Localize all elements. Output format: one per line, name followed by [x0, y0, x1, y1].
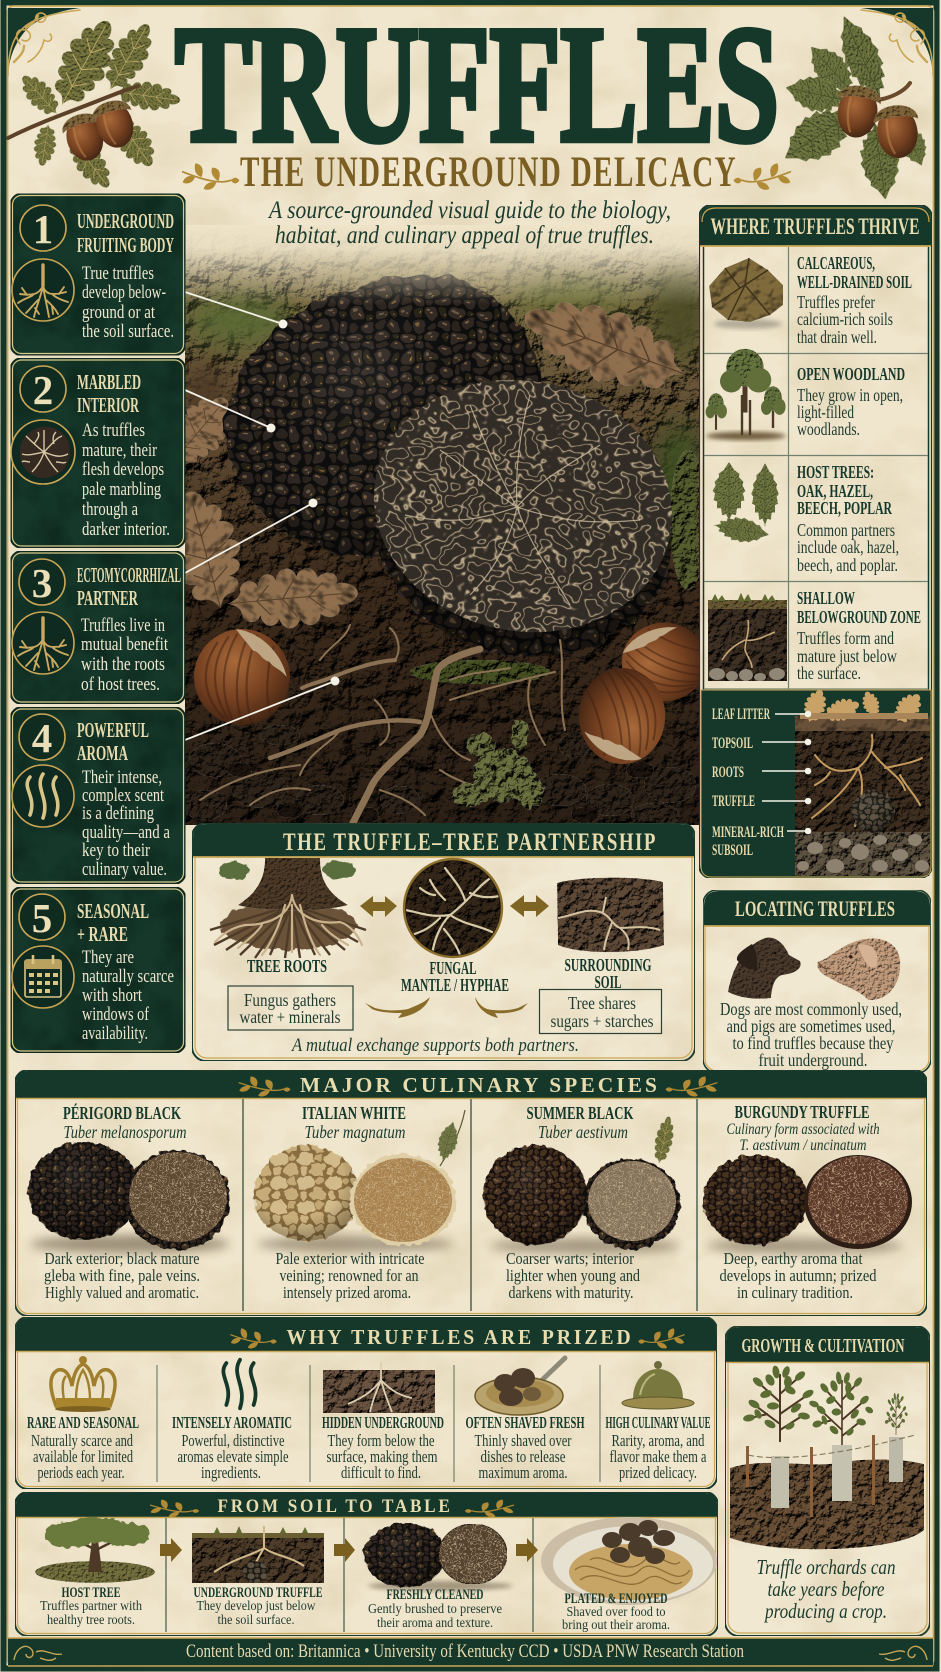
- reason: high culinary value: [606, 1361, 710, 1482]
- young trees in tubes: [743, 1365, 915, 1508]
- footer band: [8, 1638, 933, 1668]
- body text: with short: [82, 985, 143, 1006]
- reason: hidden underground: [322, 1362, 444, 1482]
- step: plated and enjoyed: Shaved over food to: [566, 1605, 666, 1620]
- species: burgundy truffle: Culinary form associated with: [726, 1121, 880, 1138]
- fungal mantle circle: [404, 859, 502, 958]
- labels: [247, 955, 652, 995]
- description: Dogs are most commonly used,: [720, 999, 902, 1019]
- body text: develop below-: [82, 282, 166, 303]
- body text: availability.: [82, 1023, 148, 1044]
- row: calcareous soil: Truffles prefer: [797, 292, 875, 312]
- step: host tree: HOST TREE: [62, 1585, 120, 1601]
- body text: ground or at: [82, 302, 156, 323]
- caption: Truffle orchards can: [756, 1555, 896, 1579]
- row: open woodland: [706, 349, 905, 440]
- layer labels: TRUFFLE: [712, 793, 755, 810]
- panel 5: seasonal and rare: [10, 887, 186, 1053]
- icon: aroma: [223, 1360, 256, 1408]
- illustration: [192, 1526, 324, 1583]
- species: burgundy truffle: Deep, earthy aroma that: [724, 1249, 863, 1268]
- header band: [704, 891, 930, 926]
- body text: [82, 420, 170, 540]
- heading: [77, 370, 141, 417]
- reason: often shaved fresh: Thinly shaved over: [474, 1431, 572, 1450]
- body text: True truffles: [82, 263, 154, 284]
- reason: hidden underground: difficult to find.: [341, 1463, 421, 1482]
- reason: high culinary value: flavor make them a: [610, 1447, 707, 1466]
- cut truffle: [804, 1155, 912, 1249]
- whole truffle: [28, 1142, 140, 1240]
- heading: PARTNER: [77, 586, 139, 610]
- species: italian white: veining; renowned for an: [280, 1266, 419, 1285]
- species: italian white: [254, 1103, 465, 1302]
- step: host tree: healthy tree roots.: [47, 1613, 135, 1628]
- reason: hidden underground: surface, making them: [326, 1447, 438, 1466]
- species: perigord black: [28, 1102, 230, 1302]
- heading: FRUITING BODY: [77, 233, 174, 257]
- tagline: [267, 197, 671, 249]
- row: host trees: OAK, HAZEL,: [797, 481, 873, 501]
- header band: WHY TRUFFLES ARE PRIZED: [286, 1325, 634, 1349]
- reason: intensely aromatic: aromas elevate simple: [178, 1447, 288, 1466]
- header band: [16, 1071, 926, 1098]
- icon: roots: [12, 259, 74, 321]
- heading: [77, 563, 181, 610]
- top fade into parchment: [185, 225, 699, 305]
- row: open woodland: They grow in open,: [797, 385, 903, 405]
- heading: SEASONAL: [77, 899, 149, 923]
- row: calcareous soil: CALCAREOUS,: [797, 253, 875, 273]
- description: fruit underground.: [758, 1050, 868, 1070]
- species: burgundy truffle: develops in autumn; prized: [720, 1266, 877, 1285]
- step: freshly cleaned: [364, 1523, 512, 1631]
- reason: intensely aromatic: [172, 1360, 292, 1482]
- icon: cloche: [622, 1361, 694, 1409]
- row: host trees: include oak, hazel,: [797, 537, 899, 557]
- icon: calendar: [12, 946, 74, 1008]
- species: italian white: ITALIAN WHITE: [302, 1103, 406, 1123]
- whole truffle: [703, 1155, 807, 1245]
- body text: is a defining: [82, 803, 154, 824]
- number badge: [20, 205, 66, 252]
- icon: limestone rock: [709, 258, 783, 329]
- leaf litter: [799, 686, 928, 728]
- description: [720, 999, 902, 1070]
- reason: intensely aromatic: ingredients.: [201, 1463, 261, 1482]
- caption: producing a crop.: [763, 1599, 887, 1623]
- body text: with the roots: [81, 654, 165, 675]
- header band: [16, 1493, 717, 1518]
- body text: naturally scarce: [82, 966, 174, 987]
- step: host tree: [35, 1517, 155, 1628]
- panel: why truffles are prized: [15, 1317, 717, 1489]
- layer labels: SUBSOIL: [712, 842, 753, 859]
- header band: [193, 824, 694, 857]
- body text: They are: [82, 947, 134, 968]
- header band: MAJOR CULINARY SPECIES: [300, 1073, 660, 1097]
- icon: roots: [12, 612, 74, 674]
- body text: of host trees.: [81, 674, 160, 695]
- text: ECTOMYCORRHIZAL: [77, 563, 181, 587]
- row: host trees: BEECH, POPLAR: [797, 498, 893, 518]
- icon: trees: [706, 349, 786, 440]
- callout: tree shares: sugars + starches: [550, 1011, 654, 1031]
- header band: [700, 206, 931, 246]
- description: and pigs are sometimes used,: [726, 1016, 896, 1036]
- sources: Content based on: Britannica • University of Kentucky CCD • USDA PNW Research Station: [186, 1641, 744, 1662]
- cut truffle: [124, 1150, 230, 1250]
- icon: pig head: [817, 938, 900, 1000]
- soil mound: [730, 1460, 924, 1549]
- arrow: [516, 1538, 538, 1562]
- species: summer black: SUMMER BLACK: [526, 1103, 634, 1123]
- heading: INTERIOR: [77, 393, 139, 417]
- whole truffle: [224, 274, 541, 557]
- labels: TREE ROOTS: [247, 956, 327, 976]
- header band: [726, 1327, 929, 1362]
- header band: FROM SOIL TO TABLE: [218, 1496, 452, 1517]
- illustration: [364, 1523, 512, 1591]
- row: shallow belowground zone: Truffles form and: [797, 628, 894, 648]
- reason: hidden underground: They form below the: [328, 1431, 434, 1450]
- row: host trees: [712, 462, 899, 575]
- corner ornament top right: [861, 8, 933, 76]
- species: perigord black: PÉRIGORD BLACK: [63, 1102, 181, 1123]
- body text: quality—and a: [82, 822, 170, 843]
- step: underground truffle: the soil surface.: [218, 1613, 294, 1628]
- reason: often shaved fresh: maximum aroma.: [478, 1463, 568, 1482]
- main photo: truffles on forest floor: [155, 225, 722, 827]
- panel 4: powerful aroma: [10, 707, 186, 884]
- layer labels: TOPSOIL: [712, 735, 753, 752]
- cut truffle: [350, 1154, 456, 1246]
- row: host trees: Common partners: [797, 520, 895, 540]
- body text: pale marbling: [82, 479, 161, 500]
- shadow: [30, 1235, 230, 1253]
- species: summer black: Tuber aestivum: [538, 1122, 628, 1142]
- species: summer black: [483, 1103, 680, 1302]
- icon: soil section: [708, 594, 787, 681]
- heading: MARBLED: [77, 370, 141, 394]
- panel: from soil to table: [15, 1492, 718, 1636]
- tagline: habitat, and culinary appeal of true truffles.: [275, 222, 654, 249]
- number badge: 3: [32, 560, 52, 606]
- layer labels: MINERAL-RICH: [712, 824, 784, 841]
- forest floor soil: [185, 225, 699, 825]
- sprig: [433, 1110, 465, 1166]
- acorns: [59, 96, 140, 165]
- acorns right: [832, 83, 922, 160]
- number badge: 4: [32, 715, 52, 761]
- row: calcareous soil: calcium-rich soils: [797, 309, 893, 329]
- layer labels: ROOTS: [712, 764, 744, 781]
- number badge: 2: [33, 367, 53, 413]
- caption: take years before: [768, 1577, 884, 1601]
- row: host trees: beech, and poplar.: [797, 555, 898, 575]
- body text: windows of: [82, 1004, 149, 1025]
- branch: [8, 86, 138, 138]
- species: italian white: Pale exterior with intricate: [276, 1249, 424, 1268]
- oak leaves: [14, 10, 182, 196]
- number badge: [19, 714, 65, 761]
- twig: [878, 83, 910, 100]
- reason: rare and seasonal: available for limited: [33, 1447, 133, 1466]
- step: freshly cleaned: their aroma and texture.: [377, 1616, 493, 1631]
- species: italian white: intensely prized aroma.: [283, 1283, 411, 1302]
- row: shallow belowground zone: [708, 588, 921, 683]
- icon: crown: [51, 1356, 115, 1412]
- number badge: [19, 559, 65, 606]
- row: shallow belowground zone: SHALLOW: [797, 588, 855, 608]
- exposed roots: [200, 625, 565, 825]
- body text: mutual benefit: [81, 634, 169, 655]
- callout: fungus gathers: [228, 986, 353, 1030]
- species: burgundy truffle: in culinary tradition.: [737, 1283, 853, 1302]
- panel: where truffles thrive: [699, 205, 932, 878]
- body text: [81, 615, 169, 695]
- illustration: [541, 1517, 717, 1605]
- reason: intensely aromatic: Powerful, distinctive: [182, 1431, 284, 1450]
- step: underground truffle: UNDERGROUND TRUFFLE: [194, 1585, 322, 1601]
- icon: dog head: [728, 937, 801, 999]
- background moss and foliage: [181, 260, 710, 540]
- hazel branch top right: [772, 9, 934, 202]
- panel: truffle-tree partnership: [192, 823, 695, 1061]
- row: host trees: HOST TREES:: [797, 462, 874, 482]
- step: plated and enjoyed: PLATED & ENJOYED: [564, 1591, 668, 1607]
- surrounding soil block: [557, 878, 664, 952]
- shadow: [490, 1238, 680, 1254]
- callout leader lines: [185, 292, 340, 740]
- species: perigord black: Highly valued and aromatic.: [45, 1283, 199, 1302]
- cut truffle marbled face: [374, 380, 672, 632]
- soil cross-section diagram: [701, 686, 931, 878]
- step: freshly cleaned: FRESHLY CLEANED: [386, 1587, 484, 1603]
- tagline: A source-grounded visual guide to the biology,: [267, 197, 671, 224]
- body text: mature, their: [82, 440, 158, 461]
- dead oak leaves right: [524, 302, 685, 388]
- body text: Their intense,: [82, 767, 162, 788]
- labels: SOIL: [594, 972, 622, 992]
- species: burgundy truffle: [703, 1102, 912, 1302]
- icon: marbled slice: [11, 420, 75, 484]
- heading: [77, 899, 149, 946]
- number badge: 5: [32, 895, 52, 941]
- icon: leaves: [712, 462, 779, 547]
- reason: rare and seasonal: RARE AND SEASONAL: [27, 1413, 139, 1432]
- leader dots: [762, 711, 811, 834]
- body text: [82, 767, 170, 880]
- soil clods: [183, 725, 696, 827]
- step: plated and enjoyed: [541, 1517, 717, 1633]
- species: burgundy truffle: BURGUNDY TRUFFLE: [734, 1102, 870, 1122]
- step: underground truffle: [192, 1526, 324, 1628]
- reason: hidden underground: HIDDEN UNDERGROUND: [322, 1413, 444, 1432]
- heading: + RARE: [77, 922, 128, 946]
- labels: SURROUNDING: [564, 955, 652, 975]
- cut truffle rind: [374, 516, 672, 658]
- exchange arrows: [360, 895, 549, 917]
- corner ornament top left: [8, 8, 80, 76]
- species: perigord black: Tuber melanosporum: [64, 1122, 186, 1142]
- body text: through a: [82, 499, 138, 520]
- row: shallow belowground zone: the surface.: [797, 663, 861, 683]
- body text: the soil surface.: [82, 321, 174, 342]
- icon: soil with roots: [323, 1362, 435, 1413]
- body text: flesh develops: [82, 459, 164, 480]
- callout: tree shares: [540, 990, 662, 1034]
- panel: major culinary species: [15, 1070, 927, 1316]
- body text: culinary value.: [82, 859, 167, 880]
- dead oak leaves left: [185, 397, 358, 628]
- shadow: [707, 1238, 903, 1254]
- heading: AROMA: [77, 741, 129, 765]
- body text: complex scent: [82, 785, 165, 806]
- shadow: [257, 1236, 453, 1252]
- reason: often shaved fresh: OFTEN SHAVED FRESH: [466, 1413, 584, 1432]
- heading: POWERFUL: [77, 718, 149, 742]
- panel 3: ectomycorrhizal partner: [10, 551, 186, 704]
- caption: [756, 1555, 896, 1623]
- body text: darker interior.: [82, 519, 170, 540]
- labels: FUNGAL: [430, 958, 476, 978]
- species: summer black: Coarser warts; interior: [506, 1249, 634, 1268]
- moss tuft: [452, 720, 544, 808]
- reason: high culinary value: Rarity, aroma, and: [612, 1431, 705, 1450]
- stakes: [746, 1435, 875, 1517]
- icon: aroma steam: [12, 765, 74, 827]
- panel: locating truffles: [703, 890, 931, 1073]
- reason: rare and seasonal: [27, 1356, 139, 1482]
- species: italian white: Tuber magnatum: [304, 1122, 406, 1142]
- number badge: [19, 894, 65, 941]
- row: open woodland: woodlands.: [797, 419, 860, 439]
- cut truffle: [582, 1159, 680, 1249]
- reason: high culinary value: prized delicacy.: [619, 1463, 697, 1482]
- row: shallow belowground zone: mature just below: [797, 646, 897, 666]
- body text: key to their: [82, 840, 151, 861]
- oak branch top left: [8, 10, 182, 196]
- step: freshly cleaned: Gently brushed to preserve: [368, 1602, 502, 1617]
- step: plated and enjoyed: bring out their aroma.: [562, 1618, 670, 1633]
- row: calcareous soil: that drain well.: [797, 327, 877, 347]
- header band: [16, 1318, 716, 1352]
- reason: often shaved fresh: [466, 1358, 584, 1482]
- body text: [82, 263, 174, 342]
- row: calcareous soil: [709, 253, 912, 347]
- arrow: [160, 1538, 182, 1562]
- tree roots illustration: [210, 858, 366, 958]
- species: summer black: darkens with maturity.: [508, 1283, 634, 1302]
- reason: high culinary value: HIGH CULINARY VALUE: [606, 1413, 710, 1432]
- reason: often shaved fresh: dishes to release: [480, 1447, 566, 1466]
- body text: As truffles: [82, 420, 145, 441]
- swoop arrows: [365, 997, 528, 1018]
- illustration: [35, 1517, 155, 1583]
- header band: THE TRUFFLE–TREE PARTNERSHIP: [283, 829, 657, 856]
- soil layers: [795, 716, 930, 878]
- number badge: 1: [33, 206, 53, 252]
- moss at right: [410, 450, 706, 684]
- icon: plate of shavings: [475, 1358, 565, 1415]
- arrow: [334, 1538, 355, 1562]
- heading: [77, 209, 174, 257]
- whole truffle: [483, 1145, 587, 1245]
- body text: Truffles live in: [81, 615, 165, 636]
- reason: rare and seasonal: Naturally scarce and: [31, 1431, 133, 1450]
- reason: rare and seasonal: periods each year.: [38, 1463, 124, 1482]
- species: perigord black: gleba with fine, pale veins.: [44, 1266, 200, 1285]
- species: perigord black: Dark exterior; black mature: [44, 1249, 200, 1268]
- panel: growth and cultivation: [725, 1326, 930, 1636]
- footer ornament right: [879, 1646, 927, 1660]
- heading: UNDERGROUND: [77, 209, 174, 233]
- heading: [77, 718, 149, 765]
- body text: [82, 947, 174, 1044]
- reason: intensely aromatic: INTENSELY AROMATIC: [172, 1413, 292, 1432]
- species: burgundy truffle: T. aestivum / uncinatum: [740, 1137, 866, 1154]
- species: summer black: lighter when young and: [506, 1266, 640, 1285]
- labels: MANTLE / HYPHAE: [401, 975, 509, 995]
- number badge: [20, 366, 66, 413]
- step: underground truffle: They develop just below: [196, 1599, 316, 1614]
- serrated leaves: [772, 9, 934, 202]
- caption: A mutual exchange supports both partners.: [290, 1035, 579, 1056]
- footer ornament left: [14, 1646, 62, 1660]
- layer labels: [712, 706, 784, 859]
- panel 2: marbled interior: [10, 358, 186, 548]
- oak sprig: [650, 1115, 678, 1165]
- hazelnuts: [194, 622, 699, 764]
- panel 1: underground fruiting body: [10, 194, 186, 356]
- layer labels: LEAF LITTER: [712, 706, 770, 723]
- callout: fungus gathers: water + minerals: [240, 1007, 340, 1027]
- row: open woodland: light-filled: [797, 402, 854, 422]
- step: host tree: Truffles partner with: [40, 1599, 142, 1614]
- callout: tree shares: Tree shares: [568, 993, 636, 1013]
- callout: fungus gathers: Fungus gathers: [244, 990, 336, 1010]
- description: to find truffles because they: [732, 1033, 894, 1053]
- truffle in soil: [852, 790, 894, 832]
- whole truffle: [254, 1145, 358, 1241]
